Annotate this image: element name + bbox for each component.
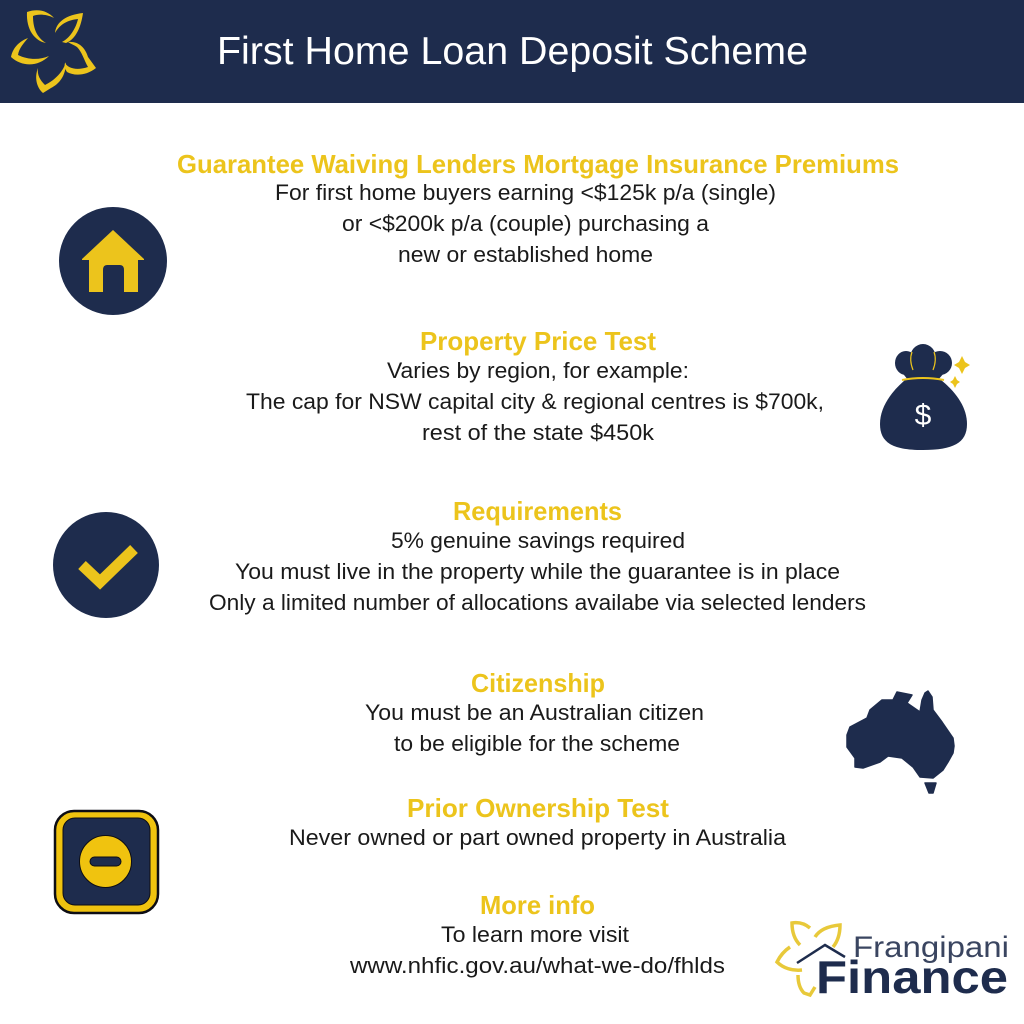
icon: check mark	[53, 512, 159, 618]
heading: prior ownership test: Prior Ownership Test	[407, 793, 669, 823]
icon: map of Australia	[847, 691, 954, 793]
logo: Frangipani Finance	[777, 923, 1009, 1003]
text: property price details: The cap for NSW capital city & regional centres is $700k,	[246, 389, 824, 414]
heading: citizenship: Citizenship	[471, 668, 605, 698]
text: citizenship details: You must be an Australian citizen	[365, 700, 704, 725]
icon: frangipani flower logo	[11, 10, 96, 93]
text: property price details: rest of the state $450k	[422, 420, 655, 445]
icon: money bag	[880, 344, 970, 450]
text: more info details	[349, 922, 725, 978]
heading: guarantee: Guarantee Waiving Lenders Mortgage Insurance Premiums	[177, 149, 899, 179]
icon: house	[59, 207, 167, 315]
text: more info details: To learn more visit	[441, 922, 629, 947]
title: First Home Loan Deposit Scheme	[217, 30, 808, 73]
text: citizenship details: to be eligible for the scheme	[394, 731, 680, 756]
section: prior ownership test	[289, 793, 787, 850]
text: guarantee details: or <$200k p/a (couple) purchasing a	[342, 211, 710, 236]
text: citizenship details	[365, 700, 704, 756]
text: requirements details: You must live in the property while the guarantee is in place	[235, 559, 840, 584]
logo word: Frangipani: Frangipani	[853, 931, 1009, 964]
icon: minus button	[55, 811, 158, 913]
logo flower	[777, 923, 840, 995]
section: property price test	[246, 326, 824, 445]
text: property price details: Varies by region, for example:	[387, 358, 689, 383]
text: prior ownership details: Never owned or part owned property in Australia	[289, 825, 787, 850]
heading: requirements: Requirements	[453, 496, 622, 526]
text: guarantee details	[275, 180, 776, 267]
heading: property price test: Property Price Test	[420, 326, 656, 356]
section: more info	[349, 890, 725, 978]
logo word: Finance: Finance	[816, 951, 1008, 1003]
logo roof	[797, 945, 845, 963]
section: citizenship	[365, 668, 704, 756]
text: guarantee details: For first home buyers earning <$125k p/a (single)	[275, 180, 776, 205]
text: guarantee details: new or established home	[398, 242, 653, 267]
icon: money bag: $	[915, 399, 932, 432]
section: guarantee	[177, 149, 899, 267]
text: requirements details: 5% genuine savings required	[391, 528, 685, 553]
header banner	[0, 0, 1024, 103]
section: requirements	[209, 496, 866, 615]
text: requirements details: Only a limited number of allocations availabe via selected lenders	[209, 590, 866, 615]
text: property price details	[246, 358, 824, 445]
text: requirements details	[209, 528, 866, 615]
text: more info details: www.nhfic.gov.au/what-we-do/fhlds	[349, 953, 725, 978]
heading: more info: More info	[480, 890, 595, 920]
